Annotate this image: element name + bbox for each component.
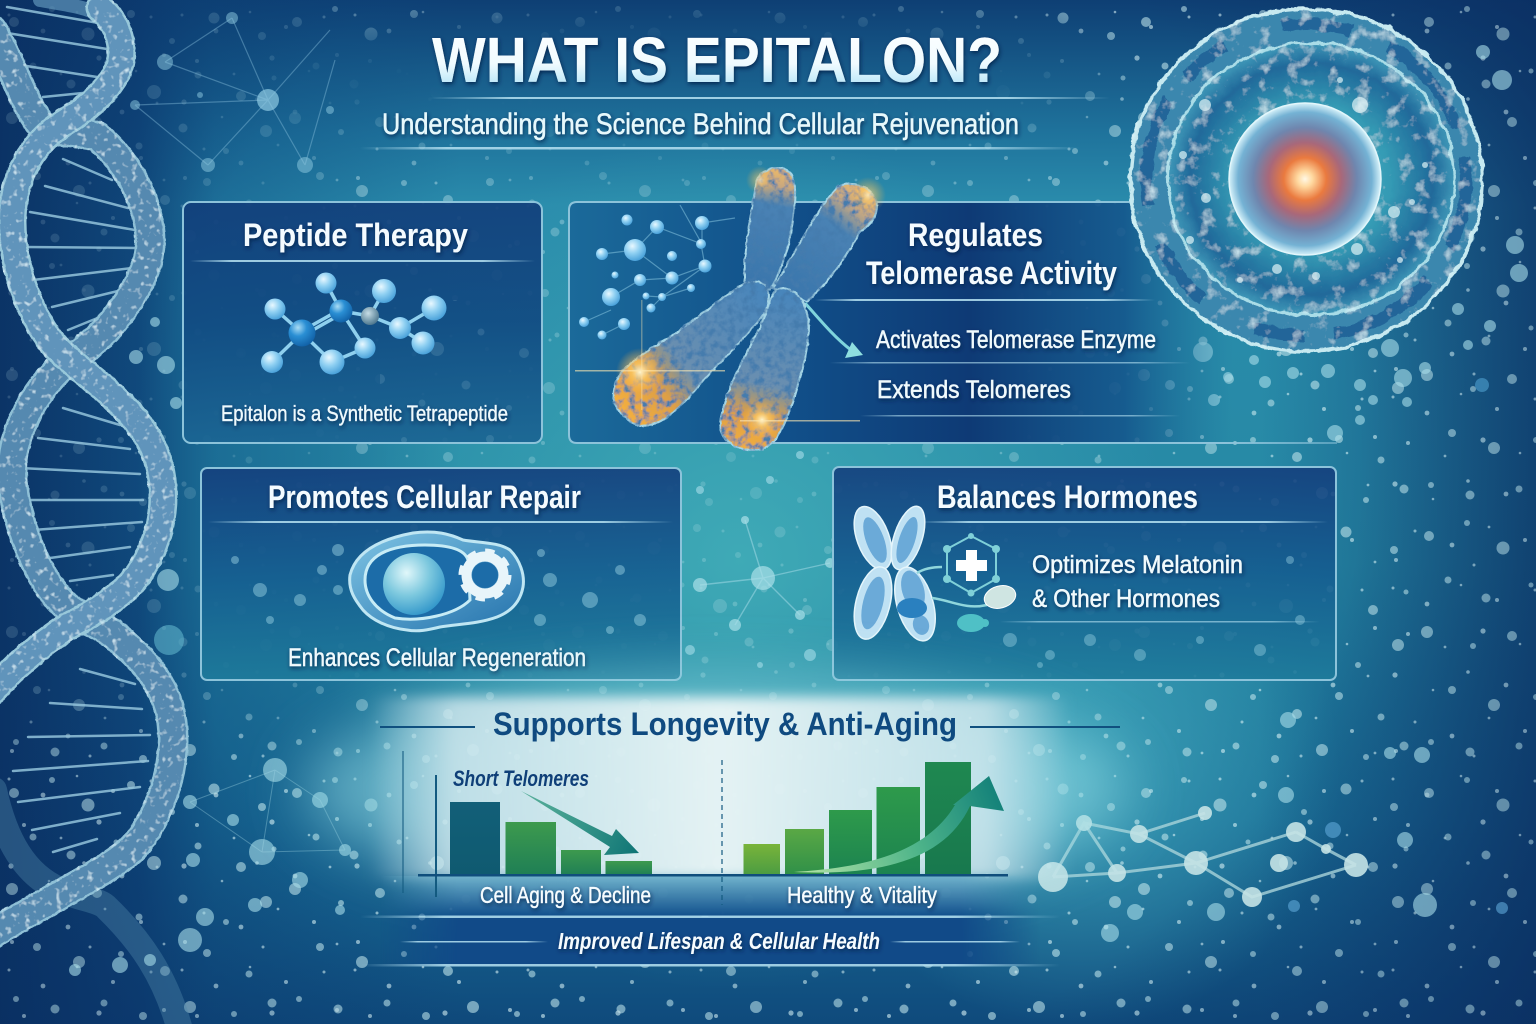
caption: synthetic tetrapeptide: Epitalon is a Synthetic Tetrapeptide — [221, 401, 508, 426]
panel: promotes cellular repair — [201, 468, 681, 680]
title rule — [430, 97, 1110, 99]
heading: regulates telomerase activity: Telomerase Activity — [866, 255, 1117, 291]
molecular network — [579, 205, 735, 340]
heading side rules — [380, 726, 1120, 728]
cell illustration — [1130, 9, 1482, 351]
text: extends telomeres: Extends Telomeres — [877, 376, 1071, 404]
divider — [815, 299, 1155, 301]
dots — [1003, 556, 1305, 668]
panel: supports longevity — [305, 680, 1125, 966]
band rules — [360, 916, 1060, 966]
heading: peptide therapy: Peptide Therapy — [243, 217, 468, 253]
text: optimizes melatonin: Optimizes Melatonin — [1032, 551, 1243, 579]
band below chart — [380, 876, 1040, 965]
icon: repair cell with gear — [350, 532, 523, 631]
arrow: chromosome to telomerase — [805, 303, 863, 358]
heading: promotes cellular repair: Promotes Cellular Repair — [268, 479, 581, 515]
divider — [1000, 621, 1320, 622]
particle network: upper left — [130, 12, 335, 173]
divider — [830, 362, 1190, 364]
icon: molecule — [261, 272, 446, 374]
heading: supports longevity & anti-aging: Supports Longevity & Anti-Aging — [493, 706, 957, 742]
divider — [860, 415, 1180, 416]
footer: improved lifespan: Improved Lifespan & Cellular Health — [558, 928, 880, 954]
label: cell aging & decline: Cell Aging & Decline — [480, 882, 651, 908]
label: healthy & vitality: Healthy & Vitality — [787, 882, 937, 908]
arrow: rising vitality — [794, 776, 1004, 873]
dots — [231, 544, 646, 634]
panel: balances hormones — [833, 467, 1336, 680]
divider — [920, 521, 1328, 523]
heading: regulates telomerase activity — [866, 217, 1117, 291]
panel: regulates telomerase activity — [569, 202, 1340, 443]
divider — [190, 260, 535, 262]
heading: balances hormones: Balances Hormones — [937, 479, 1198, 515]
particle network: centre — [693, 516, 835, 631]
panel: peptide therapy — [183, 202, 542, 443]
bar chart: cell aging — [450, 802, 652, 875]
particle network: lower right — [1038, 806, 1368, 907]
caption: enhances cellular regeneration: Enhances Cellular Regeneration — [288, 644, 586, 672]
cell nucleus — [1229, 103, 1381, 255]
subtitle rule — [360, 147, 1080, 150]
arrow: decline — [521, 791, 639, 855]
chart baseline — [418, 874, 1008, 876]
dna helix — [0, 0, 180, 1024]
text: optimizes melatonin: & Other Hormones — [1032, 585, 1220, 613]
icon: chromosome with glowing telomeres — [575, 166, 886, 450]
subtitle: Understanding the Science Behind Cellular Rejuvenation — [382, 108, 1019, 141]
telomere flares — [575, 166, 886, 440]
icon: hormone hexagon with plus — [917, 533, 1018, 632]
title: WHAT IS EPITALON? — [432, 24, 1002, 96]
divider — [208, 521, 673, 523]
label: short telomeres: Short Telomeres — [453, 766, 589, 791]
heading: regulates telomerase activity: Regulates — [908, 217, 1043, 253]
text: activates telomerase enzyme: Activates Telomerase Enzyme — [876, 326, 1156, 354]
icon: x chromosome — [847, 502, 943, 645]
bar chart: healthy vitality — [744, 762, 971, 875]
text: optimizes melatonin — [1032, 551, 1243, 613]
axes — [403, 751, 722, 905]
